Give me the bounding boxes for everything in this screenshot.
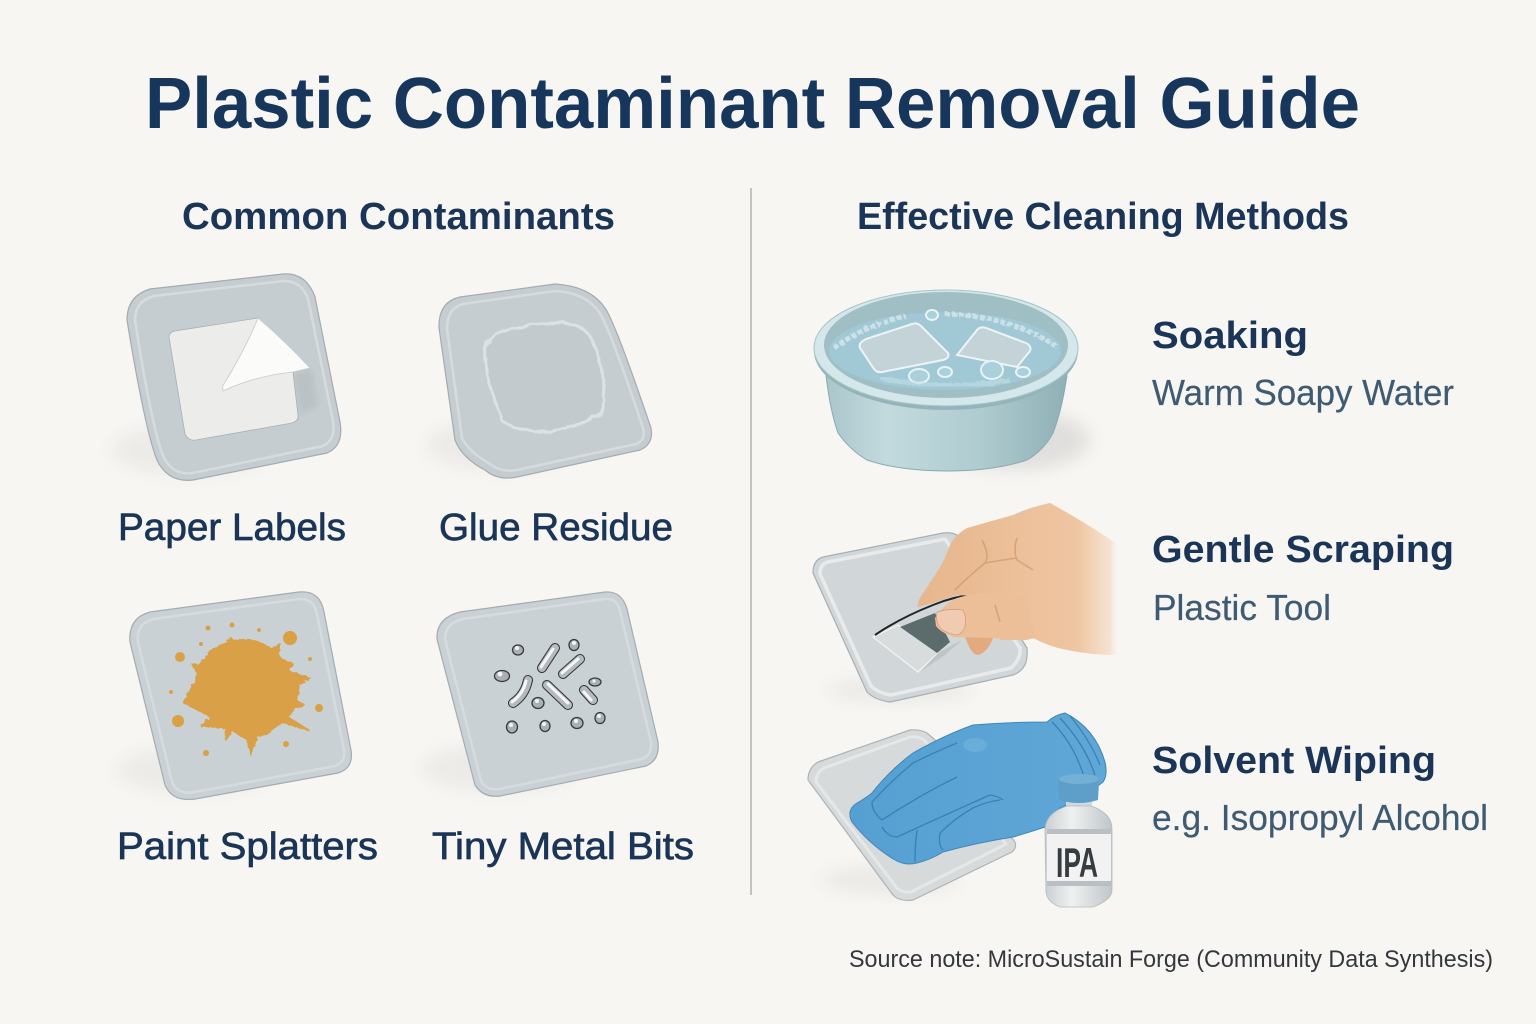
method: gentle scraping: Plastic Tool [1153, 587, 1331, 628]
tile: paper labels [110, 274, 341, 480]
metal fragments [494, 640, 605, 733]
heading: common contaminants: Common Contaminants [182, 196, 615, 238]
tile: tiny metal bits [420, 592, 658, 796]
illustration: solvent wiping [808, 713, 1112, 907]
heading: effective cleaning methods: Effective Cleaning Methods [857, 196, 1349, 238]
method: solvent wiping: Solvent Wiping [1152, 740, 1436, 782]
method: gentle scraping [1152, 529, 1454, 628]
illustration: gentle scraping [813, 503, 1118, 702]
label: tiny metal bits: Tiny Metal Bits [432, 826, 694, 868]
hand [918, 503, 1118, 655]
soaking tile left [860, 323, 948, 372]
plastic tile [813, 533, 1027, 702]
blue glove [850, 713, 1106, 864]
tile: paint splatters [115, 592, 351, 799]
glue patch [486, 323, 604, 432]
source note: Source note: MicroSustain Forge (Community Data Synthesis) [849, 946, 1493, 973]
plastic scraper [873, 594, 977, 672]
method: solvent wiping [1152, 740, 1488, 838]
paper label with peeled corner [169, 318, 318, 440]
label: paint splatters: Paint Splatters [117, 826, 378, 868]
thumb [935, 593, 1035, 640]
label: paper labels: Paper Labels [118, 507, 346, 549]
label: glue residue: Glue Residue [439, 507, 673, 549]
method: soaking: Soaking [1152, 315, 1308, 357]
illustration: soaking bowl [814, 290, 1090, 471]
IPA label text: IPA [1056, 839, 1098, 886]
orange paint splat [169, 622, 323, 756]
method: soaking [1152, 315, 1454, 413]
soaking tile right [957, 327, 1030, 367]
lower finger [962, 628, 1000, 655]
method: solvent wiping: e.g. Isopropyl Alcohol [1152, 797, 1488, 838]
tile: glue residue [425, 284, 652, 478]
soap bubbles [834, 310, 1056, 386]
method: soaking: Warm Soapy Water [1152, 372, 1454, 413]
method: gentle scraping: Gentle Scraping [1152, 529, 1454, 571]
wiped tile [808, 730, 1016, 900]
panel: common contaminants [110, 196, 694, 868]
title: Plastic Contaminant Removal Guide [145, 64, 1360, 144]
IPA bottle [1045, 774, 1112, 907]
panel: effective cleaning methods [808, 196, 1488, 907]
